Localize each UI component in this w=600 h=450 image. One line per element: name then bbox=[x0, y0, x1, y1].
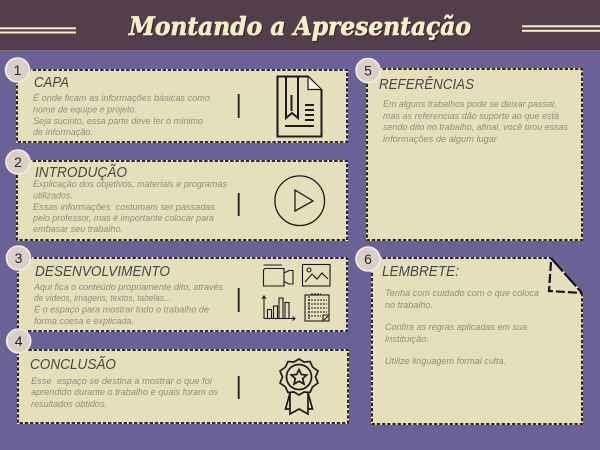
text block: introdução: embasar seu trabalho. bbox=[33, 224, 123, 235]
text block: capa: de informação. bbox=[33, 127, 93, 138]
icon: document with bookmark bbox=[278, 76, 322, 136]
text block: introdução: pelo professor, mas é importante colocar para bbox=[32, 213, 214, 224]
text block: capa: nome de equipe e projeto. bbox=[33, 104, 137, 116]
number badge 2: 2 bbox=[14, 154, 22, 170]
divider bbox=[238, 94, 240, 118]
text block: referências bbox=[383, 99, 568, 145]
heading: referências: REFERÊNCIAS bbox=[379, 76, 474, 93]
text block: desenvolvimento: Aqui fica o conteúdo propriamente dito, através bbox=[33, 282, 223, 293]
text block: desenvolvimento: forma coesa e explicada. bbox=[34, 316, 134, 327]
text block: referências: informações de algum lugar bbox=[383, 134, 498, 145]
icon: bar chart bbox=[262, 296, 295, 320]
heading: conclusão: CONCLUSÃO bbox=[30, 356, 116, 373]
text block: lembrete: Confira as regras aplicadas em sua bbox=[385, 322, 527, 333]
text block: desenvolvimento bbox=[33, 282, 223, 327]
text block: referências: Em alguns trabalhos pode se deixar passar, bbox=[383, 99, 557, 110]
text block: conclusão: Esse espaço se destina a mostrar o que foi bbox=[31, 376, 213, 387]
text block: referências: sendo dito no trabalho, afinal, você tirou essas bbox=[383, 122, 568, 133]
number badge 5: 5 bbox=[364, 62, 372, 78]
text block: lembrete bbox=[385, 288, 539, 367]
text block: conclusão: aprendido durante o trabalho e quais foram os bbox=[31, 387, 218, 398]
text block: conclusão bbox=[31, 376, 218, 410]
text block: capa: É onde ficam as informações básicas como bbox=[33, 93, 211, 104]
icon: play button bbox=[275, 176, 325, 226]
icon: award medal bbox=[280, 359, 318, 414]
number badge 3 bbox=[6, 246, 30, 270]
panel: conclusão bbox=[7, 329, 348, 423]
text block: lembrete: instituição. bbox=[385, 334, 429, 345]
divider bbox=[238, 376, 240, 399]
text block: introdução: Essas informações costumam ser passadas bbox=[33, 202, 215, 213]
right double rule bbox=[522, 25, 600, 32]
heading: lembrete: LEMBRETE: bbox=[382, 264, 459, 280]
title: Montando a Apresentação bbox=[129, 13, 472, 42]
number badge 4 bbox=[7, 329, 31, 353]
number badge 5 bbox=[356, 58, 380, 82]
panel: desenvolvimento bbox=[6, 246, 347, 331]
text block: referências: mas as referencias dão suporte ao que está bbox=[383, 111, 560, 122]
text block: lembrete: Tenha com cuidado com o que coloca bbox=[385, 288, 539, 299]
icon: video camera bbox=[264, 265, 293, 286]
left double rule bbox=[0, 27, 76, 34]
icon: notepad bbox=[305, 294, 329, 321]
panel: lembrete bbox=[356, 247, 582, 424]
number badge 2 bbox=[6, 150, 30, 174]
text block: lembrete: no trabalho. bbox=[385, 300, 433, 311]
number badge 1 bbox=[6, 58, 30, 82]
heading: desenvolvimento: DESENVOLVIMENTO bbox=[35, 264, 170, 280]
heading: capa: CAPA bbox=[34, 75, 69, 91]
header banner bbox=[0, 0, 600, 51]
panel: capa bbox=[6, 58, 347, 142]
text block: desenvolvimento: de videos, imagens, textos, tabelas... bbox=[34, 293, 171, 304]
text block: capa: Seja sucinto, essa parte deve ter o mínimo bbox=[33, 116, 204, 127]
panel: introdução bbox=[6, 150, 347, 240]
number badge 4: 4 bbox=[15, 333, 23, 349]
title: Montando a Apresentação bbox=[128, 12, 471, 41]
text block: capa bbox=[33, 93, 211, 138]
divider bbox=[238, 288, 240, 312]
text block: introdução: utilizados. bbox=[33, 190, 73, 202]
text block: introdução bbox=[32, 179, 227, 235]
panel: referências bbox=[356, 58, 582, 240]
divider bbox=[238, 193, 240, 216]
number badge 6: 6 bbox=[364, 251, 372, 267]
number badge 6 bbox=[356, 247, 380, 271]
heading: introdução: INTRODUÇÃO bbox=[35, 164, 127, 181]
text block: lembrete: Utilize linguagem formal culta. bbox=[385, 356, 506, 367]
icon: picture bbox=[302, 264, 330, 286]
text block: conclusão: resultados obtidos. bbox=[31, 399, 107, 410]
text block: introdução: Explicação dos objetivos, materiais e programas bbox=[33, 179, 227, 190]
text block: desenvolvimento: É o espaço para mostrar todo o trabalho de bbox=[34, 305, 209, 316]
folded corner bbox=[549, 258, 582, 293]
number badge 3: 3 bbox=[15, 250, 23, 266]
number badge 1: 1 bbox=[14, 62, 22, 78]
